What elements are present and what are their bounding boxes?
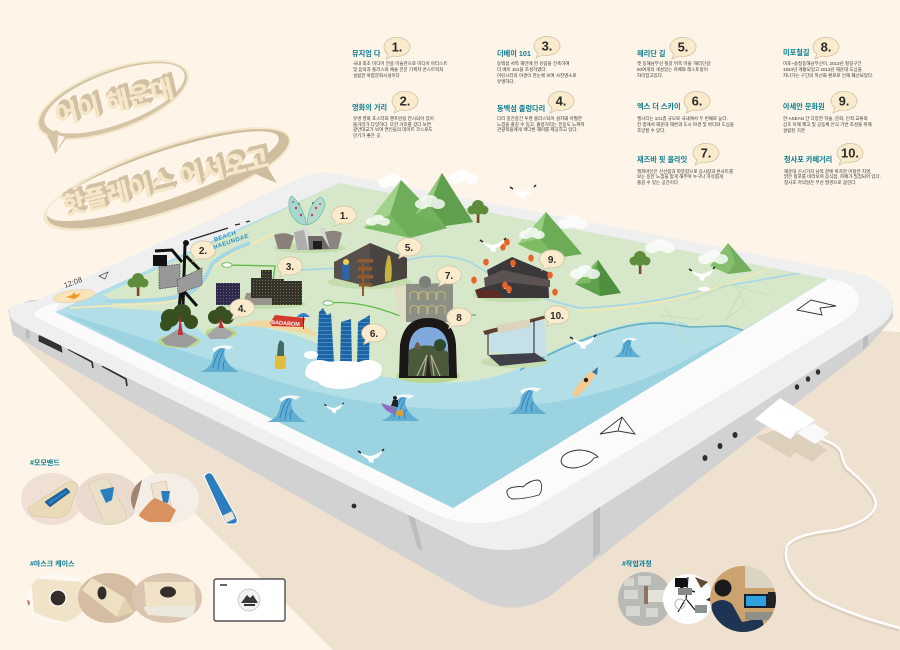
item 7: 보는 동안 느낌을 맞게 해주며 누구나 자유롭게 — [637, 173, 723, 180]
process photos — [618, 559, 778, 634]
bubble 7 — [437, 266, 461, 286]
item 10: 청사포 저녁달은 부산 팔경으로 꼽힌다. — [784, 179, 856, 186]
usb shadow — [755, 425, 827, 462]
product: mask case photos — [24, 559, 285, 626]
item 6: 전 층에서 해운대 해변과 도시 야경 및 바다와 도심을 — [637, 121, 734, 128]
item 6: 6. — [692, 94, 702, 108]
bubble 6 — [362, 324, 386, 344]
bubble 10: 10. — [550, 311, 564, 322]
mask design card — [214, 579, 285, 621]
cable — [786, 439, 900, 628]
bubble 9 — [540, 250, 564, 270]
item 9: 9. — [839, 94, 849, 108]
item 9: 아세안 문화원 — [783, 102, 825, 111]
section label band: #모모밴드 — [30, 458, 60, 467]
process photo 3 designer at desk — [710, 566, 776, 632]
item 9 — [783, 91, 872, 134]
item 2: 볼거리가 다양하다. 또한 거리를 걷다 보면 — [353, 121, 431, 128]
haeundae beach sign — [270, 313, 310, 329]
sky lanterns — [471, 239, 558, 296]
item 5 — [637, 37, 711, 79]
band product — [204, 473, 237, 524]
item 2 — [352, 91, 434, 139]
mask photo 3 — [132, 573, 202, 623]
item 6: 조망할 수 있다. — [637, 127, 666, 134]
item 1: 1. — [392, 40, 402, 54]
bubble 5: 5. — [405, 243, 413, 254]
landmark 10 cheongsapo cafe — [481, 315, 549, 368]
side dots — [352, 369, 820, 508]
item 5: 60여개의 개성있는 카페와 레스토랑이 — [637, 66, 708, 73]
item 10: 청사포 카페거리 — [784, 155, 832, 164]
bubble 8: 8 — [456, 313, 462, 324]
item 2: 2. — [400, 94, 410, 108]
seagulls — [324, 185, 715, 463]
bubble 3 — [278, 257, 302, 277]
mountain middle — [518, 212, 582, 258]
bubble 1 — [332, 206, 356, 226]
waves — [200, 338, 641, 422]
phone side seams — [25, 322, 868, 558]
item 4: 느낌을 즐길 수 있고, 출렁거리는 진동도 느껴져 — [497, 121, 584, 128]
deep sea — [60, 312, 770, 512]
item 5: 해리단 길 — [637, 49, 665, 58]
item 8: 미포철길 — [783, 48, 809, 57]
phone — [8, 170, 893, 608]
item 1: 뮤지엄 다 — [352, 49, 381, 58]
item 2: 유명 영화 포스터와 핸프린팅 전시되어 있어 — [353, 115, 434, 122]
title line 2: 핫플레이스 어서오고 — [58, 139, 272, 223]
item 4 — [497, 91, 584, 133]
title line 1: 어이 해운대 — [51, 69, 177, 133]
item 1 — [352, 37, 447, 79]
bubble frame bottom — [33, 106, 301, 252]
landmark 6 towers — [304, 308, 382, 389]
butterfly sculpture — [289, 196, 325, 225]
route — [227, 265, 476, 316]
inner bezel — [34, 279, 859, 523]
bubble 9: 9. — [548, 255, 556, 266]
usb cable shadow — [785, 441, 899, 630]
bubble 2: 2. — [199, 246, 207, 257]
clock text: 12:08 — [63, 275, 83, 290]
item 8: 1934년 개통되었고 2013년 해운대 도심을 — [783, 66, 862, 73]
item 5: 자리잡고있다. — [637, 72, 663, 79]
item 2: 영화의 거리 — [352, 103, 387, 112]
landmark 9 asean culture house — [471, 239, 558, 302]
shore rim — [520, 323, 743, 370]
side buttons — [39, 336, 127, 386]
bubble 5 — [397, 238, 421, 258]
landmark 5 haeridan house — [328, 243, 412, 296]
icon chat — [561, 450, 598, 468]
item 7 — [637, 143, 733, 186]
bubble 4 — [230, 299, 254, 319]
item 8: 지나가는 구간의 폭선화 환로로 인해 폐선되었다. — [783, 72, 873, 79]
item 2: 인기가 좋은 곳. — [353, 132, 382, 139]
item 3: 동백섬 서쪽 해안에 한 유람을 건축하여 — [497, 60, 570, 67]
item 8: 미포~송정동해남부선이, 2013년 철길구간 — [783, 60, 862, 67]
bottom bezel icons — [507, 300, 836, 499]
item 5: 5. — [678, 40, 688, 54]
item 10: 해운대 신시가지 남쪽 끝에 위치한 어항만 지명, — [784, 168, 871, 175]
beach strip text — [210, 227, 250, 251]
kayak — [572, 367, 598, 397]
beach strip text: HAEUNDAE — [213, 233, 250, 251]
bubble 2 — [191, 241, 215, 261]
mountain left back — [364, 180, 447, 238]
cloud base — [305, 360, 382, 389]
speaker slots — [190, 221, 250, 240]
bubble 7: 7. — [445, 271, 453, 282]
item 6 — [637, 91, 734, 134]
map number bubbles — [191, 206, 569, 344]
usb plug — [755, 398, 829, 444]
icon bookmark flag — [797, 300, 836, 315]
icon paper plane — [600, 417, 635, 434]
icon heart — [507, 480, 542, 499]
landmark 7 jazz bar — [393, 276, 453, 322]
sea — [55, 183, 828, 508]
notification pill — [52, 287, 96, 305]
item 3: 3. — [542, 38, 552, 54]
process photo 2 map drafts — [663, 574, 713, 624]
photo circle 2 — [80, 473, 136, 525]
screen map — [55, 183, 828, 512]
item 1: 및 음악과 플러스와 예술 전문 기획자 콘스트럭처 — [353, 66, 443, 73]
beach — [233, 320, 318, 337]
trees — [128, 200, 650, 296]
landmark 4 dongbaek islands — [158, 304, 237, 348]
item 7: 즐길 수 있는 공간이다 — [637, 179, 679, 186]
mountain far right — [710, 243, 752, 274]
mermaid statue — [274, 340, 286, 369]
item 4: 다리 중간중간 투명 플라스틱이 설치돼 아찔한 — [497, 115, 582, 122]
land — [103, 183, 828, 382]
item 8: 8. — [821, 40, 831, 54]
item 3: 더 베이 101을 조성하였다. — [497, 66, 547, 73]
speech bubble frames — [27, 44, 301, 252]
landmark 1 museum — [274, 196, 346, 253]
item 9: 설립된 기관 — [783, 127, 805, 134]
item 3: 더베이 101 — [497, 49, 531, 58]
item 6: 엘시티는 101층 규모로 국내에서 두 번째로 높다. — [637, 115, 728, 122]
item 1: 국내 최초 미디어 전용 미술관으로 미디어 아티스트 — [353, 60, 447, 67]
mask photo 1 — [27, 573, 82, 623]
item 6: 엑스 더 스카이 — [637, 102, 681, 111]
beach strip text: BEACH — [213, 230, 237, 244]
bubble frame top — [27, 44, 199, 156]
mountain right back — [415, 173, 473, 226]
phone top face — [9, 173, 893, 550]
surfer — [381, 396, 403, 416]
item 4: 관광객들에게 색다른 재미를 제공하고 있다. — [497, 126, 578, 133]
clouds behind mountains — [378, 170, 478, 188]
mountain lower right — [575, 260, 621, 296]
table surface — [20, 328, 900, 650]
item 7: 엘피바인은 신선함과 따뜻함으로 음시창과 온사트를 — [637, 168, 733, 175]
landmark 2 film statue — [153, 240, 202, 308]
clouds on mountains — [366, 195, 728, 279]
phone side body — [8, 300, 893, 608]
item 7: 재즈바 핏 올라잇 — [637, 155, 688, 164]
item 10 — [784, 143, 881, 186]
item 10: 10. — [841, 146, 859, 160]
item 2: 광안대교가 보여 연인들의 데이트 코스로도 — [353, 126, 433, 133]
item 4: 4. — [556, 94, 566, 108]
mask photo 2 — [78, 573, 136, 623]
item 7: 7. — [701, 146, 711, 160]
item 10: 맑은 항포를 바라보며 음식점, 카페가 밀집되어 있다. — [784, 173, 881, 180]
item 9: 한-ASEAN 간 다양한 학술, 문화, 인적 교류와 — [783, 115, 868, 122]
item 9: 상호 이해 제고 및 공동체 인식 기반 조성을 위해 — [783, 121, 872, 128]
mountains — [364, 173, 752, 296]
item 3: 마린시티의 야경이 한눈에 보여 사진명소로 — [497, 72, 577, 79]
photo circle 3 — [131, 473, 199, 525]
bubble 10 — [545, 306, 569, 326]
section label process: #작업과정 — [622, 559, 652, 568]
item 3: 유명하다. — [497, 78, 515, 85]
item 1: 설립한 복합문화시설이다 — [353, 72, 401, 79]
rivers and roads — [70, 234, 274, 308]
haeundae beach sign: BADABOM — [271, 320, 300, 328]
navigation triangle — [99, 272, 108, 279]
bubble 3: 3. — [286, 262, 294, 273]
item 3 — [497, 36, 577, 85]
process photo 1 sketches — [618, 572, 672, 626]
product: band photos — [18, 458, 237, 530]
item 8 — [783, 37, 873, 79]
bubble 4: 4. — [238, 304, 246, 315]
landmark 8 tunnel — [396, 318, 460, 383]
section label mask: #마스크 케이스 — [30, 559, 75, 568]
photo circle 1 — [21, 473, 80, 525]
item 4: 동백섬 출렁다리 — [497, 104, 545, 113]
bubble 6: 6. — [370, 329, 378, 340]
bubble 1: 1. — [340, 211, 348, 222]
status bar — [52, 221, 250, 305]
bubble 8 — [447, 308, 471, 328]
landmark 3 the bay 101 — [216, 270, 306, 309]
item 5: 옛 동해남부선 철길 뒤쪽 마을 '해리단길' — [637, 60, 711, 67]
